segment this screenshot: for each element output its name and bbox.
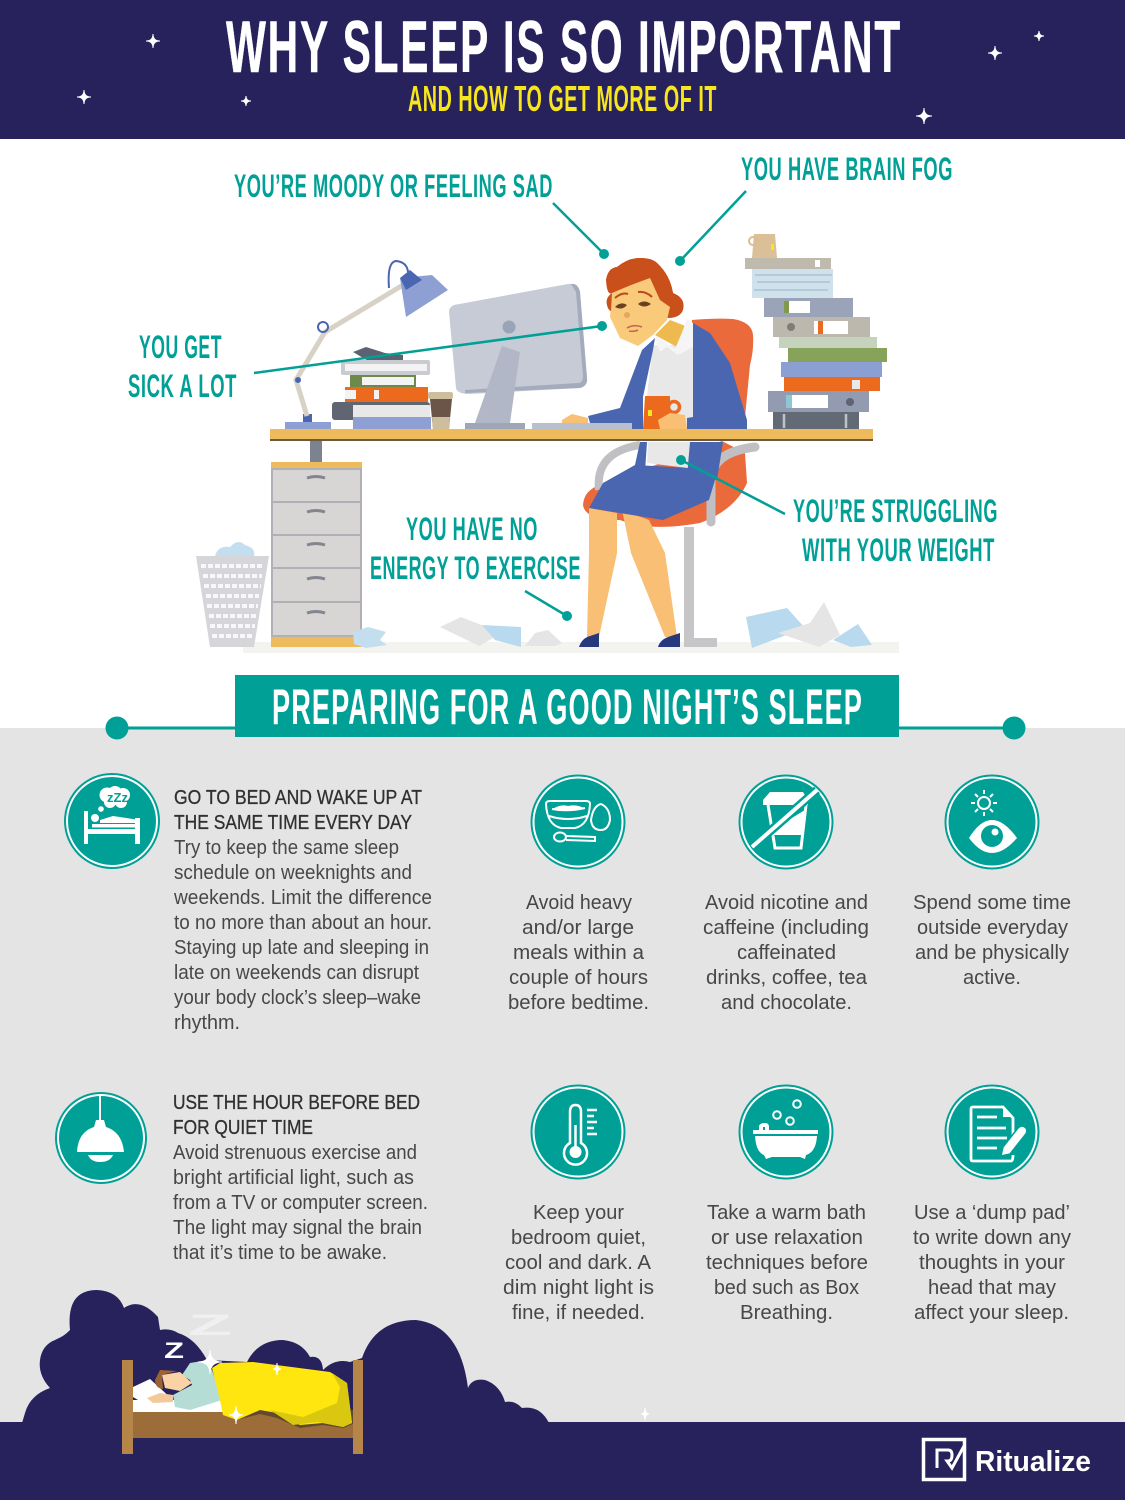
icon: bed and sleep cloud: zZz [107, 790, 128, 805]
filing cabinet [271, 462, 362, 647]
logo: Ritualize [924, 1440, 1091, 1480]
text: nicotine and caffeine: caffeinated [737, 942, 836, 964]
icon: sun and eye [944, 774, 1040, 870]
woman [562, 258, 747, 647]
text: warm bath: or use relaxation [711, 1227, 863, 1249]
wastebasket [196, 542, 269, 647]
illustration: sleeping person in bed [122, 1309, 363, 1454]
desk lamp [285, 261, 448, 429]
night clouds [22, 1290, 549, 1423]
hair front [606, 258, 673, 300]
icon: hanging lamp [55, 1092, 147, 1184]
logo: Ritualize: Ritualize [975, 1446, 1091, 1478]
text: warm bath: Take a warm bath [707, 1202, 866, 1224]
text: warm bath [706, 1202, 868, 1324]
text: heavy meals [508, 892, 649, 1014]
text: consistent bedtime: rhythm. [174, 1012, 240, 1034]
text: warm bath: techniques before [706, 1252, 868, 1274]
text: heavy meals: couple of hours [509, 967, 648, 989]
text: nicotine and caffeine: and chocolate. [721, 992, 852, 1014]
text: dump pad: head that may [928, 1277, 1056, 1299]
text: quiet time: bright artificial light, such as [173, 1167, 414, 1189]
text: outside time: and be physically [915, 942, 1069, 964]
illustration: woman at desk [196, 234, 899, 653]
text: quiet time: USE THE HOUR BEFORE BED [173, 1092, 420, 1114]
text: bedroom conditions: dim night light is [503, 1277, 654, 1299]
mug and hands [562, 414, 588, 423]
text: consistent bedtime: schedule on weeknights and [174, 862, 412, 884]
text: nicotine and caffeine: caffeine (including [703, 917, 869, 939]
text: heavy meals: meals within a [513, 942, 645, 964]
text: warm bath: Breathing. [740, 1302, 833, 1324]
text: quiet time: that it’s time to be awake. [173, 1242, 387, 1264]
text: heavy meals: and/or large [522, 917, 634, 939]
stack of books on desk [332, 347, 431, 429]
text: bedroom conditions: cool and dark. A [505, 1252, 652, 1274]
skirt [589, 465, 718, 520]
text: consistent bedtime: Try to keep the same sleep [174, 837, 399, 859]
text: dump pad: thoughts in your [919, 1252, 1065, 1274]
collar [655, 318, 695, 355]
face [610, 278, 670, 346]
text: bedroom conditions: Keep your [533, 1202, 624, 1224]
chair [583, 319, 755, 647]
text: nicotine and caffeine: drinks, coffee, tea [706, 967, 868, 989]
subtitle: AND HOW TO GET MORE OF IT [408, 78, 717, 119]
computer monitor [449, 284, 633, 429]
text: consistent bedtime: your body clock’s sleep–wake [174, 987, 421, 1009]
bed sparkles [198, 1350, 649, 1424]
callout: brain fog: YOU HAVE BRAIN FOG [741, 151, 953, 187]
icon: dump pad [944, 1084, 1040, 1180]
callout: sick a lot: YOU GET [139, 329, 222, 365]
callout: no energy [370, 511, 581, 621]
text: consistent bedtime: Staying up late and sleeping in [174, 937, 429, 959]
legs [587, 508, 617, 637]
text: quiet time: Avoid strenuous exercise and [173, 1142, 417, 1164]
text: outside time: Spend some time [913, 892, 1071, 914]
text: consistent bedtime: to no more than about an hour. [174, 912, 432, 934]
section banner [106, 675, 1026, 740]
header stars [77, 31, 1044, 124]
text: quiet time: from a TV or computer screen. [173, 1192, 428, 1214]
jacket [588, 338, 655, 429]
text: consistent bedtime [173, 787, 432, 1034]
text: nicotine and caffeine [703, 892, 869, 1014]
text: consistent bedtime: THE SAME TIME EVERY DAY [174, 812, 412, 834]
text: dump pad [913, 1202, 1071, 1324]
shoes [579, 633, 599, 647]
text: consistent bedtime: late on weekends can disrupt [174, 962, 419, 984]
text: quiet time: FOR QUIET TIME [173, 1117, 313, 1139]
icon: bath [738, 1084, 834, 1180]
text: heavy meals: Avoid heavy [526, 892, 632, 914]
right stack of binders [745, 234, 887, 429]
panel: footer band [0, 1422, 1125, 1500]
callout: moody: YOU’RE MOODY OR FEELING SAD [234, 168, 553, 204]
panel: header [0, 0, 1125, 139]
crumpled papers on floor [353, 602, 872, 648]
hair back [606, 258, 684, 318]
sleep z letters: Z [164, 1338, 184, 1363]
callout: sick a lot: SICK A LOT [128, 368, 237, 404]
icon: thermometer [530, 1084, 626, 1180]
text: dump pad: to write down any [913, 1227, 1071, 1249]
text: quiet time: The light may signal the brain [173, 1217, 422, 1239]
callout: no energy: YOU HAVE NO [406, 511, 538, 547]
icon: meal bowl [530, 774, 626, 870]
text: dump pad: Use a ‘dump pad’ [914, 1202, 1070, 1224]
panel: grey background [0, 728, 1125, 1500]
facial features [615, 303, 627, 309]
coffee cup [428, 392, 453, 429]
callout: no energy: ENERGY TO EXERCISE [370, 550, 581, 586]
shirt [643, 345, 693, 429]
illustration: sleeping person in bed: Z [188, 1309, 232, 1342]
callout: brain fog [675, 151, 953, 266]
icon: bed and sleep cloud [64, 773, 160, 869]
text: dump pad: affect your sleep. [914, 1302, 1069, 1324]
desk [270, 429, 873, 462]
text: outside time: active. [963, 967, 1021, 989]
callout: sick a lot [128, 321, 607, 404]
text: outside time: outside everyday [917, 917, 1068, 939]
floor shadow [243, 642, 899, 653]
text: quiet time [173, 1092, 428, 1264]
text: consistent bedtime: GO TO BED AND WAKE UP AT [174, 787, 422, 809]
text: bedroom conditions: fine, if needed. [512, 1302, 645, 1324]
text: nicotine and caffeine: Avoid nicotine and [705, 892, 868, 914]
text: outside time [913, 892, 1071, 989]
callout: weight [676, 455, 998, 568]
text: bedroom conditions: bedroom quiet, [511, 1227, 646, 1249]
neck [655, 320, 688, 347]
icon: no caffeine [738, 774, 834, 870]
text: heavy meals: before bedtime. [508, 992, 649, 1014]
text: warm bath: bed such as Box [714, 1277, 859, 1299]
text: bedroom conditions [503, 1202, 654, 1324]
callout: moody [234, 168, 609, 259]
text: consistent bedtime: weekends. Limit the difference [173, 887, 432, 909]
